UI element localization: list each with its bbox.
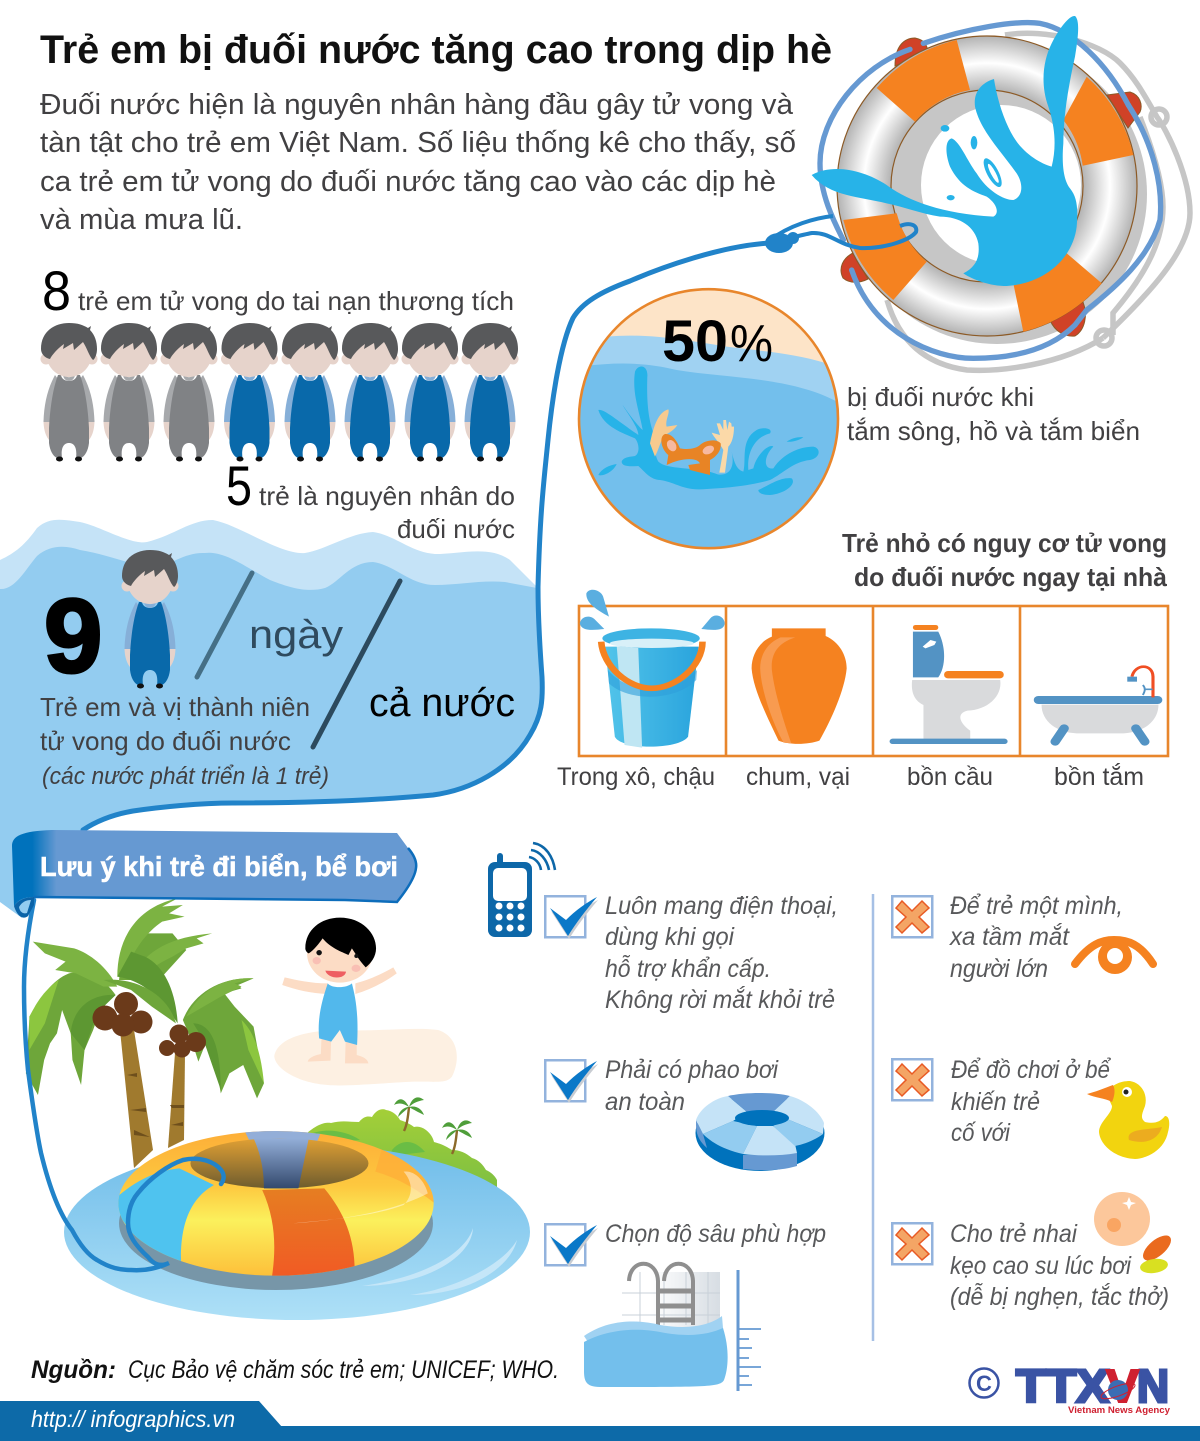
stat: 5 children: đuối nước: [397, 514, 515, 544]
TTXVN logo: TTX: [1016, 1360, 1109, 1412]
footer bar: [0, 1401, 1200, 1441]
icon: eye: [1075, 940, 1153, 974]
swim float: [117, 1128, 435, 1290]
TTXVN logo: V: [1106, 1360, 1139, 1412]
home risk labels: bồn cầu: [907, 763, 993, 791]
stat: 5 children: 5: [226, 454, 252, 517]
text: Để trẻ một mình,: [950, 892, 1123, 920]
text: cố với: [951, 1119, 1011, 1147]
home risk labels: Trong xô, chậu: [557, 763, 715, 791]
text: hỗ trợ khẩn cấp.: [605, 954, 771, 983]
row of 8 children, 3 grey and 5 blue: [40, 323, 518, 462]
water wave panel: [0, 520, 542, 918]
rope loop on float: [24, 900, 224, 1270]
divider: [872, 894, 874, 1341]
banner: tips heading: Lưu ý khi trẻ đi biển, bể bơi: [40, 851, 398, 882]
stat: 8 children: [42, 259, 514, 322]
text: [605, 1056, 779, 1116]
home risk heading: [842, 528, 1168, 592]
home risk labels: chum, vại: [746, 763, 850, 791]
text: người lớn: [950, 955, 1048, 983]
drowning child head: [661, 434, 721, 475]
TTXVN logo: Vietnam News Agency: [1068, 1405, 1171, 1416]
slash: [313, 581, 400, 747]
pond: [64, 1144, 530, 1320]
cả nước: cả nước: [369, 681, 515, 725]
do tip 3: [545, 1220, 826, 1267]
ngày: ngày: [249, 613, 343, 657]
icon: rubber duck: [1087, 1081, 1169, 1159]
icon: cross: [892, 1223, 932, 1264]
stat: 8 children: trẻ em tử vong do tai nạn thương tích: [78, 286, 514, 316]
icon: chewing gum and candy: [1094, 1192, 1175, 1275]
drowning hands: [650, 409, 677, 457]
stat: 9 children per day nationwide: [40, 550, 515, 790]
icon: toilet: [890, 625, 1008, 744]
icon: blue swim ring: [696, 1093, 824, 1171]
text: [605, 892, 838, 1014]
description: [40, 692, 329, 790]
icon: swimming pool with ladder and depth gauge: [584, 1264, 761, 1391]
50 percent caption: tắm sông, hồ và tắm biển: [847, 416, 1140, 446]
intro paragraph: ca trẻ em tử vong do đuối nước tăng cao vào các dịp hè: [40, 166, 776, 198]
text: dùng khi gọi: [605, 923, 735, 951]
do not tip 3: [892, 1220, 1169, 1311]
icon: cross: [892, 896, 932, 937]
number 9: 9: [44, 578, 102, 695]
text: Không rời mắt khỏi trẻ: [605, 985, 835, 1014]
icon: check: [545, 896, 598, 939]
home risk labels: [557, 762, 1144, 791]
lifebuoy blue rope: [820, 23, 1161, 358]
50 percent caption: [847, 382, 1140, 446]
description: (các nước phát triển là 1 trẻ): [42, 763, 329, 790]
pond ripples: [362, 1228, 517, 1295]
icon: check: [545, 1060, 598, 1103]
lifebuoy orange bands: [843, 40, 1133, 332]
source line: Nguồn:: [31, 1356, 116, 1384]
icon: bathtub: [1034, 667, 1162, 742]
footer bar: http:// infographics.vn: [31, 1406, 235, 1432]
palm trees: [26, 898, 264, 1168]
sand patch: [274, 1029, 457, 1085]
text: [950, 1220, 1169, 1311]
TTXVN logo: N: [1137, 1360, 1169, 1412]
lifebuoy illustration: [765, 16, 1190, 370]
intro paragraph: tàn tật cho trẻ em Việt Nam. Số liệu thống kê cho thấy, số: [40, 127, 796, 159]
text: (dễ bị nghẹn, tắc thở): [950, 1282, 1169, 1311]
icon: cross: [892, 1059, 932, 1100]
text: Cho trẻ nhai: [950, 1220, 1078, 1248]
island: [307, 1097, 497, 1192]
intro paragraph: và mùa mưa lũ.: [40, 204, 243, 236]
lifebuoy loop rope and knot: [765, 216, 916, 253]
do not tip 2: [892, 1056, 1111, 1147]
home risk boxes: [579, 606, 1168, 756]
do not tip 1: [892, 892, 1123, 983]
copyright symbol: C: [976, 1371, 992, 1396]
title: Trẻ em bị đuối nước tăng cao trong dịp hè: [40, 28, 832, 72]
TTXVN logo: [1016, 1360, 1171, 1416]
beach illustration: [24, 898, 530, 1320]
do tip 1: [545, 892, 838, 1014]
intro paragraph: [40, 89, 796, 236]
icon: mobile phone: [488, 843, 555, 937]
intro paragraph: Đuối nước hiện là nguyên nhân hàng đầu gây tử vong và: [40, 89, 794, 121]
home risk heading: do đuối nước ngay tại nhà: [854, 562, 1168, 592]
text: [949, 892, 1123, 983]
text: Để đồ chơi ở bể: [951, 1056, 1111, 1084]
text: Phải có phao bơi: [605, 1056, 779, 1084]
50% figure: 50: [662, 309, 728, 374]
description: tử vong do đuối nước: [40, 726, 291, 756]
water splash: [812, 16, 1078, 286]
lifebuoy ring shadow: [847, 44, 1147, 344]
home risk heading: Trẻ nhỏ có nguy cơ tử vong: [842, 528, 1167, 558]
lifebuoy grey rope shadow: [887, 33, 1190, 370]
source line: Cục Bảo vệ chăm sóc trẻ em; UNICEF; WHO.: [128, 1356, 559, 1384]
copyright symbol: [970, 1368, 998, 1398]
boy on the sand: [282, 918, 397, 1063]
text: an toàn: [605, 1088, 685, 1116]
stat: 5 children: [226, 454, 515, 544]
home risk labels: bồn tắm: [1054, 762, 1144, 791]
coconuts: [92, 992, 206, 1058]
50 percent circle: [578, 288, 840, 550]
stat: 5 children: trẻ là nguyên nhân do: [259, 481, 515, 511]
lifebuoy ring: [837, 36, 1137, 336]
rope: long line linking lifebuoy to float: [83, 243, 770, 830]
icon: bucket: [580, 590, 725, 748]
slash: [197, 573, 252, 677]
text: khiến trẻ: [951, 1088, 1040, 1116]
do tip 2: [545, 1056, 779, 1116]
description: Trẻ em và vị thành niên: [40, 692, 310, 722]
stat: 8 children: 8: [42, 259, 71, 322]
50 percent caption: bị đuối nước khi: [847, 382, 1034, 412]
lifebuoy tabs: [841, 38, 1141, 336]
text: Luôn mang điện thoại,: [605, 892, 838, 920]
banner: tips heading: [12, 830, 416, 918]
drowning splash: [598, 366, 819, 489]
text: kẹo cao su lúc bơi: [950, 1252, 1132, 1280]
icon: water jar: [752, 628, 847, 744]
child icon: [122, 550, 178, 688]
text: Chọn độ sâu phù hợp: [605, 1220, 826, 1248]
50% figure: [662, 309, 773, 374]
icon: check: [545, 1224, 598, 1267]
text: xa tầm mắt: [949, 922, 1070, 951]
text: [951, 1056, 1111, 1147]
50% figure: %: [730, 315, 773, 373]
